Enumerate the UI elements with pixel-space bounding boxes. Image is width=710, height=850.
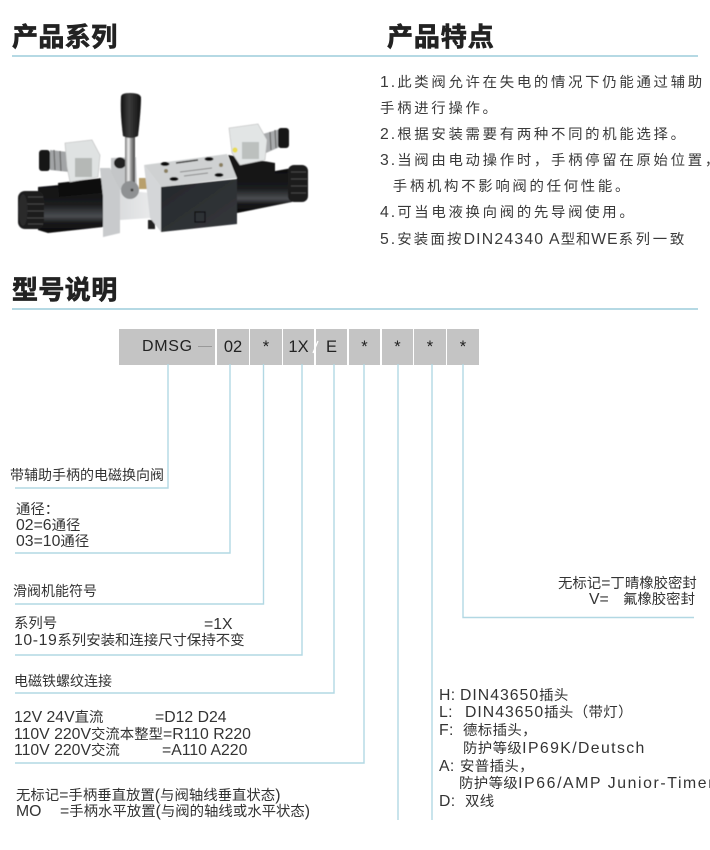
model code boxes: * [427, 338, 433, 356]
left coil [18, 181, 103, 233]
label: handle position: =手柄水平放置(与阀的轴线或水平状态) [60, 803, 310, 820]
label: plug types: 双线 [465, 794, 495, 810]
connector lines [15, 364, 694, 820]
model code boxes: * [394, 338, 401, 356]
model code boxes: DMSG [142, 338, 193, 355]
handle [121, 93, 141, 199]
right coil [237, 165, 308, 213]
label: series number: =1X [204, 616, 233, 633]
right terminal block [228, 155, 275, 179]
label: voltage codes: =A110 A220 [162, 742, 247, 759]
label: plug types: H: L: F: A: D: [439, 688, 456, 810]
aluminium manual block [100, 157, 155, 237]
label: plug types: DIN43650插头（带灯） [465, 704, 633, 721]
model code boxes: * [361, 338, 368, 356]
label: seal material: 氟橡胶密封 [623, 592, 695, 608]
label: plug types [439, 688, 710, 810]
label: seal material: V= [589, 591, 609, 608]
right connector [229, 124, 289, 165]
label: voltage codes: 12V 24V直流 110V 220V交流本整型=R110 R220 110V 220V交流 [14, 709, 251, 759]
label: series number: 系列号 10-19系列安装和连接尺寸保持不变 [14, 616, 244, 648]
label: valve type: 带辅助手柄的电磁换向阀 [10, 467, 164, 483]
heading: product features: 产品特点 [387, 22, 495, 52]
label: voltage codes: =D12 D24 [155, 709, 227, 726]
left connector [39, 140, 100, 182]
label: bore size: 通径： 02=6通径 03=10通径 [16, 502, 89, 550]
valve body [144, 154, 237, 232]
model code boxes [119, 329, 479, 365]
label: handle position: 无标记=手柄垂直放置(与阀轴线垂直状态) MO [16, 787, 280, 820]
model code boxes: * [460, 338, 466, 356]
label: plug types: 防护等级IP69K/Deutsch [463, 740, 646, 757]
product photo: solenoid valve with manual handle [17, 92, 309, 238]
label: solenoid thread connection: 电磁铁螺纹连接 [14, 673, 112, 689]
model code boxes: E [326, 338, 337, 356]
model code boxes: * [263, 338, 269, 356]
label: plug types: 德标插头， [463, 723, 537, 739]
model code boxes: 02 [224, 338, 242, 356]
model code boxes: 1X [288, 338, 309, 356]
label: plug types: 安普插头， [460, 759, 534, 775]
divider: model description [12, 308, 698, 310]
heading: product series: 产品系列 [12, 22, 118, 52]
label: seal material: 无标记=丁晴橡胶密封 [558, 575, 697, 592]
label: spool function symbol: 滑阀机能符号 [13, 583, 97, 599]
label: seal material [558, 575, 697, 608]
label: plug types: 防护等级IP66/AMP Junior-Timer [459, 775, 710, 792]
left terminal block [58, 178, 102, 197]
heading: model description: 型号说明 [12, 275, 118, 305]
divider: product series and features [12, 55, 698, 56]
